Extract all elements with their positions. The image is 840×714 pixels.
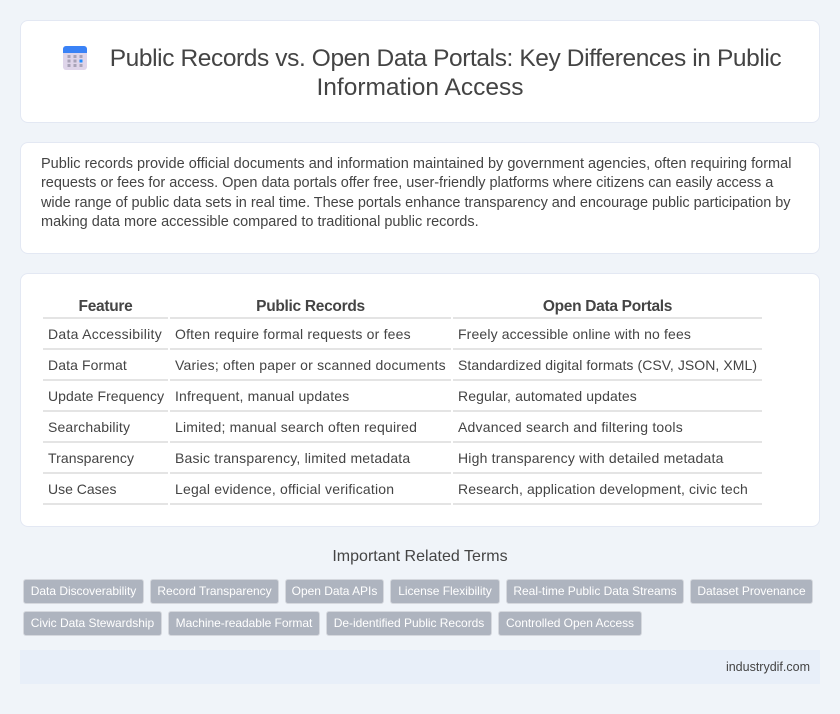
tag: Civic Data Stewardship: [23, 611, 162, 636]
icon: calendar: [63, 46, 87, 70]
row: Data Accessibility: Freely accessible online with no fees: [458, 326, 691, 342]
row: Data Format: [48, 357, 757, 373]
tag: License Flexibility: [390, 579, 500, 604]
row: Searchability: Searchability: [48, 419, 130, 435]
header card: [20, 20, 820, 123]
tag: De-identified Public Records: De-identified Public Records: [334, 616, 484, 630]
row: Use Cases: Research, application development, civic tech: [458, 481, 748, 497]
tag: Open Data APIs: [285, 579, 384, 604]
row lines: [43, 317, 762, 505]
row: Transparency: Transparency: [48, 450, 134, 466]
row: Update Frequency: Regular, automated updates: [458, 388, 637, 404]
row: Data Accessibility: Often require formal requests or fees: [175, 326, 411, 342]
related terms heading: Important Related Terms: [332, 548, 508, 565]
tag: Open Data APIs: Open Data APIs: [292, 584, 377, 598]
intro text: Public records provide official documents and information maintained by government agencies, often requiring formal: [41, 156, 791, 172]
tag: Controlled Open Access: [498, 611, 642, 636]
row: Data Format: Data Format: [48, 357, 127, 373]
row: Data Accessibility: [48, 326, 691, 342]
tag: Civic Data Stewardship: Civic Data Stewardship: [31, 616, 154, 630]
row: Use Cases: [48, 481, 748, 497]
tag: Dataset Provenance: Dataset Provenance: [697, 584, 806, 598]
tag: Dataset Provenance: [690, 579, 813, 604]
tag: License Flexibility: License Flexibility: [398, 584, 492, 598]
table header: Open Data Portals: Open Data Portals: [543, 298, 672, 315]
tag: Controlled Open Access: Controlled Open Access: [506, 616, 634, 630]
row: Searchability: Limited; manual search often required: [175, 419, 417, 435]
footer source: industrydif.com: [726, 660, 810, 674]
intro text: wide range of public data sets in real time. These portals enhance transparency and encourage public participation by: [41, 195, 791, 211]
row: Transparency: High transparency with detailed metadata: [458, 450, 724, 466]
intro text: making data more accessible compared to traditional public records.: [41, 214, 479, 230]
row: Use Cases: Legal evidence, official verification: [175, 481, 394, 497]
row: Transparency: [48, 450, 724, 466]
intro text: requests or fees for access. Open data portals offer free, user-friendly platforms where citizens can easily access a: [41, 175, 773, 191]
row: Transparency: Basic transparency, limited metadata: [175, 450, 410, 466]
row: Data Format: Standardized digital formats (CSV, JSON, XML): [458, 357, 757, 373]
footer bar: [20, 650, 820, 684]
intro text: [41, 156, 791, 230]
tag: Machine-readable Format: Machine-readable Format: [176, 616, 312, 630]
title: [110, 45, 781, 101]
title: Public Records vs. Open Data Portals: Key Differences in Public: [110, 45, 781, 72]
row: Searchability: [48, 419, 683, 435]
tag: Data Discoverability: Data Discoverability: [31, 584, 136, 598]
table header: Feature: Feature: [79, 298, 132, 315]
title: Information Access: [316, 74, 523, 101]
tag: De-identified Public Records: [326, 611, 492, 636]
tag: Real-time Public Data Streams: [506, 579, 684, 604]
row: Use Cases: Use Cases: [48, 481, 116, 497]
tag: Record Transparency: [150, 579, 279, 604]
row: Searchability: Advanced search and filtering tools: [458, 419, 683, 435]
tag: Machine-readable Format: [168, 611, 320, 636]
row: Data Format: Varies; often paper or scanned documents: [175, 357, 446, 373]
row: Update Frequency: [48, 388, 637, 404]
intro panel: [20, 142, 820, 254]
row: Update Frequency: Update Frequency: [48, 388, 164, 404]
comparison table panel: [20, 273, 820, 527]
row: Data Accessibility: Data Accessibility: [48, 326, 162, 342]
table header: Public Records: Public Records: [256, 298, 365, 315]
row: Update Frequency: Infrequent, manual updates: [175, 388, 349, 404]
tag: Real-time Public Data Streams: Real-time Public Data Streams: [513, 584, 677, 598]
tag: Record Transparency: Record Transparency: [157, 584, 272, 598]
tag: Data Discoverability: [23, 579, 144, 604]
